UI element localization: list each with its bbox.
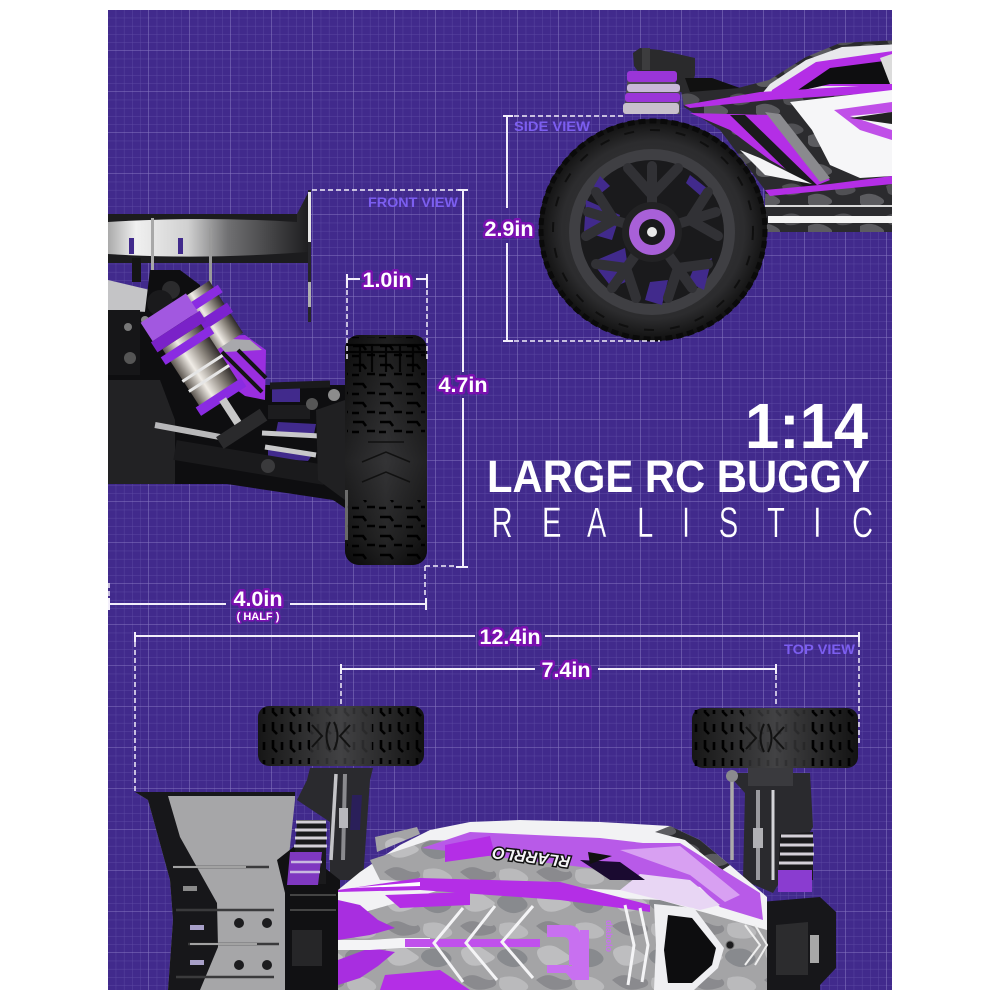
suspension arms [155,384,345,500]
purple top band [422,832,763,920]
side skirt [375,827,420,852]
logo wordmark: diabolo [604,920,614,952]
label: 2.9in: 2.9in [484,217,534,241]
side wheel [539,119,767,341]
front view dimensions [109,190,468,610]
side shock absorber [623,48,740,114]
subheading: realistic: REALISTIC [492,498,873,546]
front view: buggy illustration [108,190,427,565]
left chassis [277,845,340,990]
front tire [345,335,427,565]
purple logo [547,925,589,980]
right chassis [760,897,836,990]
label: side view: SIDE VIEW [514,119,590,134]
label: 4.7in: 4.7in [438,373,488,397]
label: 1.0in: 1.0in [362,268,412,292]
label: 12.4in: 12.4in [480,625,540,649]
left suspension arm [297,768,373,880]
center stripe [405,939,540,947]
left tire [258,706,424,766]
side view dimension [503,116,660,341]
tire [539,119,767,341]
top view body shell [338,820,767,990]
side view: buggy illustration [539,40,900,341]
right suspension arm [726,768,813,893]
white chevrons [434,905,648,985]
hub [622,202,682,262]
windshield [654,904,724,990]
brand name: RLARRLO [491,843,571,870]
purple body panel [218,335,266,400]
heading: large rc buggy: LARGE RC BUGGY [487,451,870,502]
label: front view: FRONT VIEW [368,195,458,210]
flames [338,900,395,940]
rear wing top [135,792,295,990]
left shock spring [287,820,327,885]
camo hood [338,890,767,990]
gap between suspension arms [268,388,316,461]
panel: blueprint grid background [108,10,892,990]
chassis [108,270,345,508]
tire width dimension [347,274,427,360]
rear wing [108,190,311,322]
label: 4.0in: 4.0in [234,587,282,611]
front shock absorber [140,290,267,448]
top view dimensions [135,632,859,792]
rim [569,149,735,315]
rear shock absorber [187,280,243,350]
label: half: ( HALF ) [237,611,280,623]
side body shell [681,40,900,232]
right tire [692,708,858,768]
right shock spring [778,832,814,892]
top view: buggy illustration [135,706,858,990]
label: top view: TOP VIEW [784,642,855,657]
heading: 1:14: 1:14 [745,390,868,462]
label: 7.4in: 7.4in [542,658,590,682]
